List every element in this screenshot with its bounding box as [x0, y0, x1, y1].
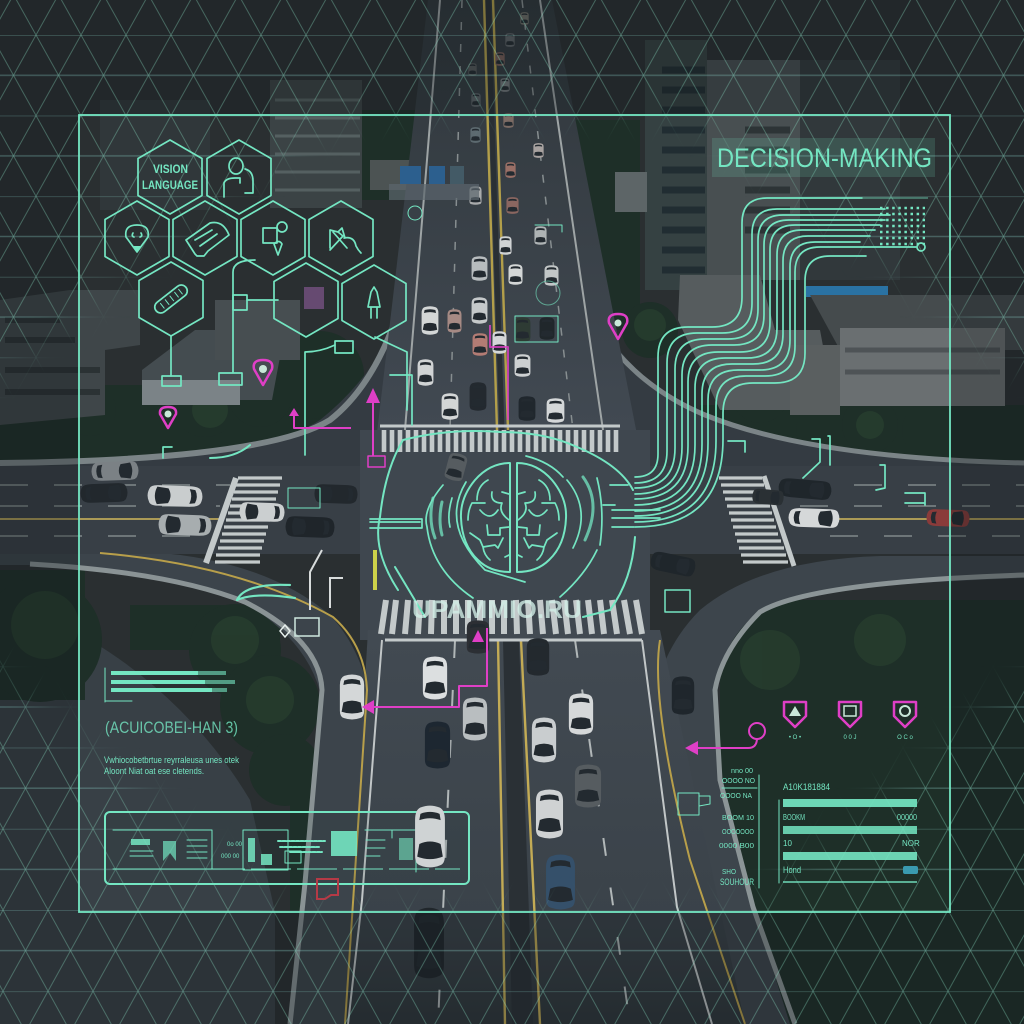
pin: [160, 407, 176, 428]
red outline marker: [317, 879, 338, 899]
side labels: SHO: [722, 867, 736, 876]
panel row labels: 00000: [897, 813, 917, 822]
pin: [609, 314, 627, 339]
yellow signal post: [373, 550, 377, 590]
main cross road: [0, 466, 1024, 554]
circuit dot matrix: [880, 208, 925, 244]
crosswalk right: [719, 478, 788, 562]
buildings top left: [0, 80, 410, 425]
side labels: OOOO NO: [722, 776, 755, 785]
hexagon: person icon: [207, 140, 271, 214]
panel row labels: 10: [783, 839, 792, 848]
lower left side road: [0, 640, 275, 1024]
pin 3: O C o: [897, 735, 913, 741]
hexagon: vision language: VISION: [153, 162, 188, 176]
side labels: OOOOOOO: [722, 827, 754, 836]
side labels: OOOO NA: [720, 791, 752, 800]
panel module 2: 000 00: [221, 854, 240, 860]
road signs gantry: [389, 166, 479, 220]
crosswalk left: [215, 478, 282, 562]
crosswalk top: [384, 430, 616, 452]
white car over panel: [415, 806, 445, 867]
right hemisphere: [517, 463, 566, 572]
panel module 2: [221, 830, 288, 870]
description: Vwhiocobetbrtue reyrraleusa unes otek: [104, 755, 239, 766]
hexagon: location pin: [105, 201, 169, 275]
hexagon connector lines and nodes: [162, 260, 412, 458]
panel heading: A10K181884: [783, 782, 830, 792]
crosswalk stripes: [206, 426, 794, 640]
lane callout boxes: [665, 590, 710, 815]
crosswalk bottom: [381, 600, 642, 634]
centre watermark text: UPAMMIO.RU: [412, 596, 582, 624]
panel module 2: 0o 00: [227, 842, 243, 848]
main vertical road upper: [375, 0, 640, 450]
hexagon: screen and map: [241, 201, 305, 275]
magenta location pins upper: [160, 314, 627, 428]
arrow left with node: [685, 723, 765, 755]
right data panel: [719, 766, 920, 888]
description: Aloont Niat oat ese cletends.: [104, 766, 204, 777]
hexagon: sensor device: [173, 201, 237, 275]
subheading: (ACUICOBEI-HAN 3): [105, 718, 238, 737]
side labels: [719, 766, 755, 887]
pin: [254, 360, 272, 385]
arrow left lower: [362, 628, 487, 714]
hexagon icon cluster: [105, 140, 406, 339]
bars: [105, 668, 235, 702]
light foliage highlights: [11, 309, 906, 724]
magenta arrows: [289, 325, 765, 755]
description: [104, 755, 239, 777]
magenta pins right: [784, 702, 916, 741]
left hemisphere: [461, 463, 510, 572]
panel row labels: [783, 813, 920, 875]
brain graphic: [370, 431, 660, 617]
hexagon: vision language: [138, 140, 202, 214]
magenta route on upper road: [490, 325, 508, 420]
panel solid square: [331, 831, 357, 856]
outer ring: [378, 431, 635, 617]
bottom data panel: [105, 812, 469, 884]
left input bus: [370, 519, 422, 528]
arrow up left: [289, 408, 351, 428]
hexagon: vision language: LANGUAGE: [142, 178, 198, 192]
arrow up centre: [366, 388, 385, 467]
side labels: BOOM 10: [722, 813, 754, 822]
panel bars: [783, 799, 917, 883]
side labels: SOUHOUR: [720, 877, 754, 887]
main frame: [79, 115, 950, 912]
right output stubs: [603, 485, 660, 527]
arrow stub at car: [472, 630, 484, 642]
panel row labels: BOOKM: [783, 813, 805, 822]
panel module 1: [113, 830, 212, 869]
blue chip: [903, 866, 918, 874]
panel module 4: [365, 830, 416, 872]
decision-making heading: [712, 138, 935, 177]
hexagon: translucent panel: [274, 263, 338, 337]
road centre lines upper: [484, 0, 508, 430]
left text block with bars: [104, 668, 239, 777]
pin 1: • O •: [789, 735, 801, 741]
buildings top right: [615, 40, 1024, 415]
hexagon: pill icon: [139, 262, 203, 336]
panel row labels: NOR: [902, 839, 920, 848]
circuit bundle lines: [635, 198, 928, 527]
pin 2: 0 0 J: [843, 735, 857, 741]
panel module 3: [278, 841, 325, 863]
hexagon: figure icon: [342, 265, 406, 339]
road centre median lower: [498, 640, 540, 1024]
panel row labels: Hond: [783, 865, 801, 875]
main vertical road lower: [345, 630, 745, 1024]
side labels: nno 00: [731, 766, 753, 775]
stop lines and edges: [380, 426, 642, 640]
road overlay markers: [210, 225, 925, 637]
hexagon: cityscape sketch: [309, 201, 373, 275]
side labels: 0000 B00: [719, 841, 754, 850]
decision-making heading: DECISION-MAKING: [717, 143, 932, 173]
concentric arcs: [426, 456, 602, 598]
